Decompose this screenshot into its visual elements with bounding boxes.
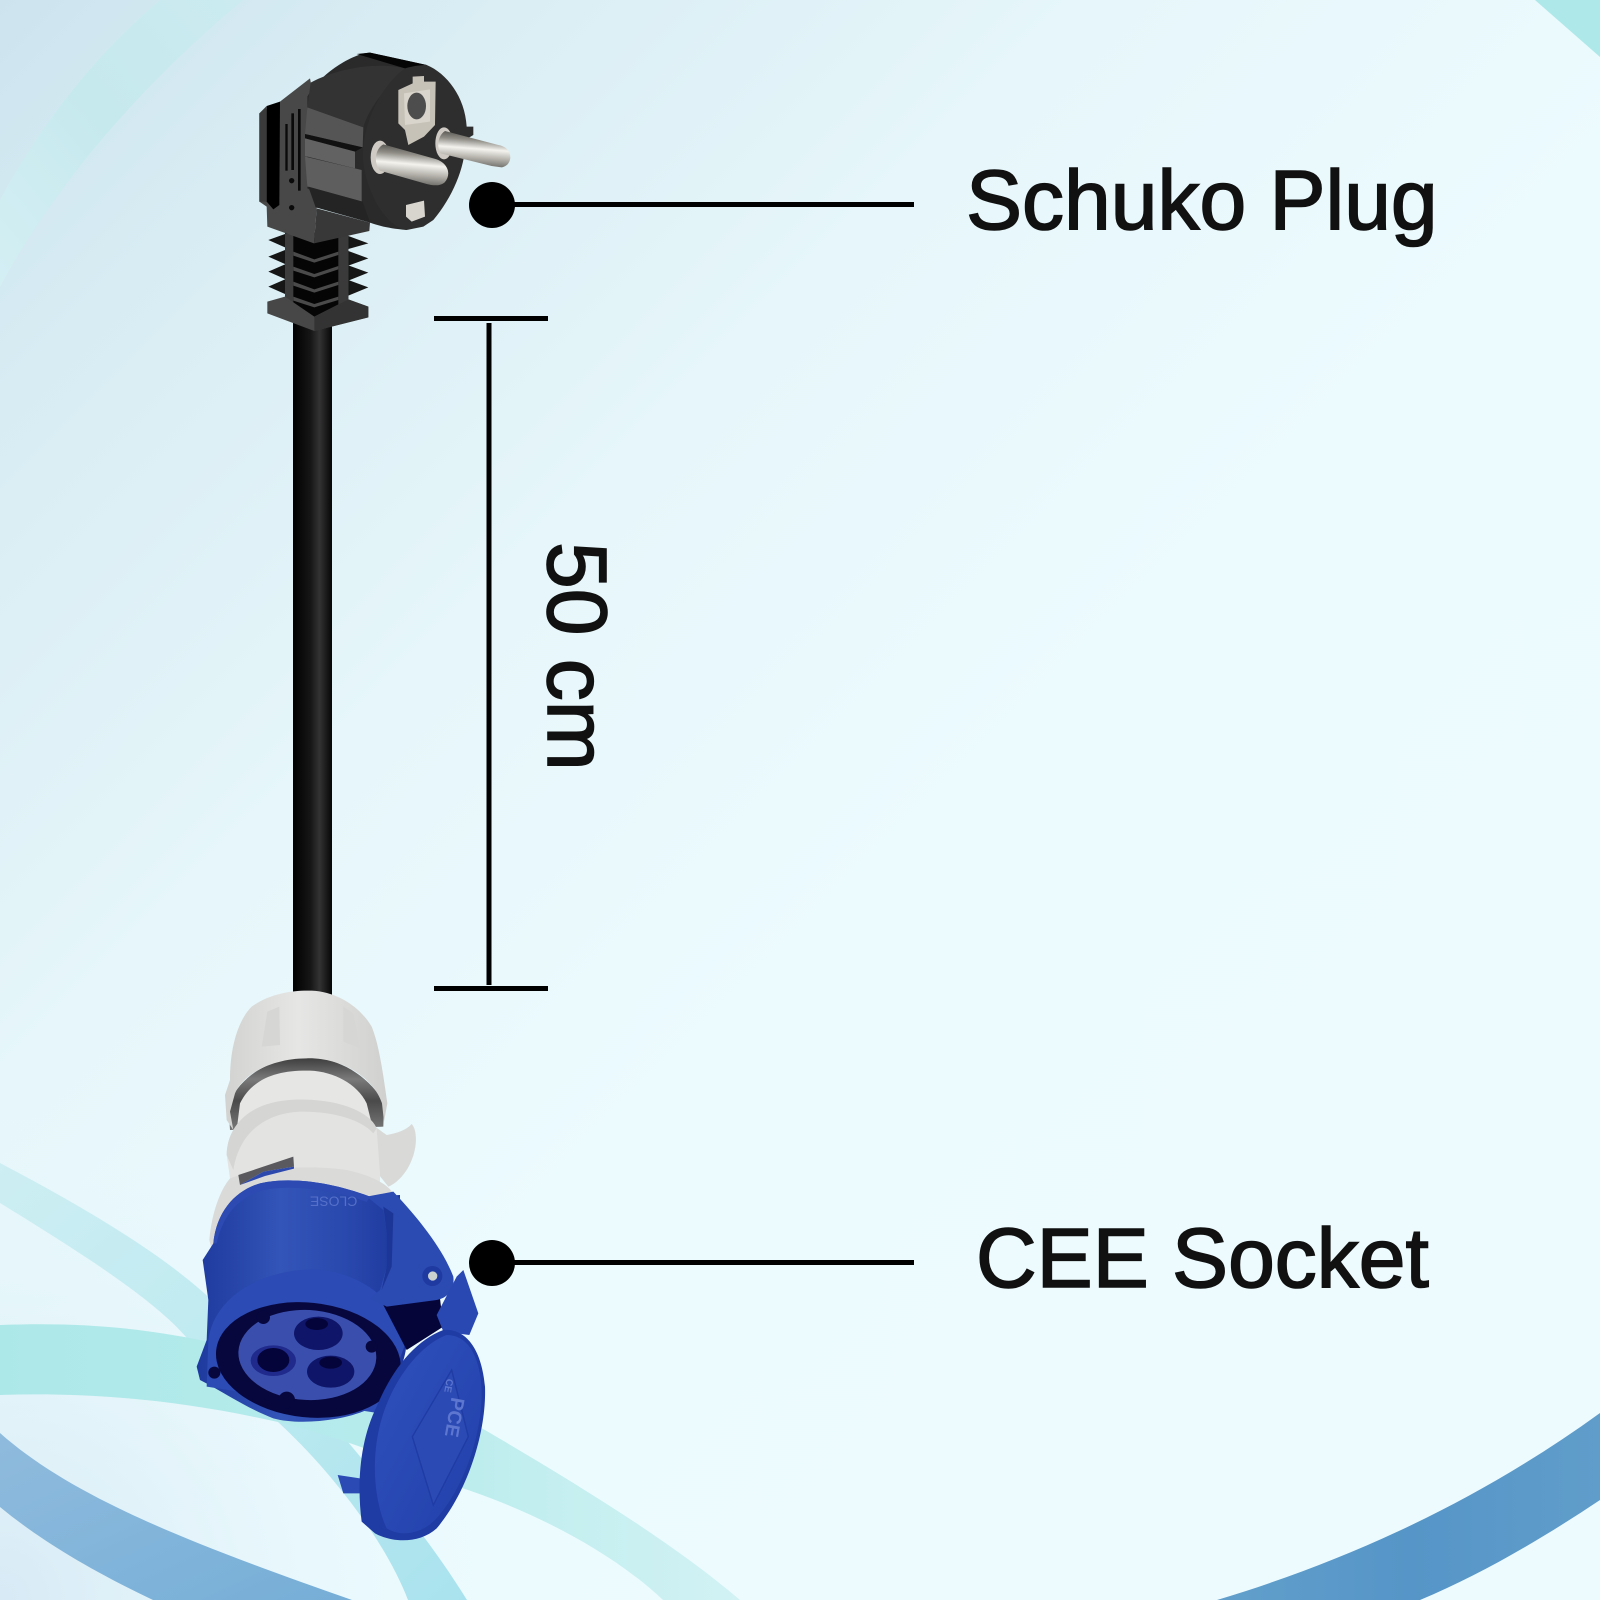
socket top rim [213,1180,370,1243]
plate notches [257,1311,378,1408]
contact holes [251,1317,354,1388]
dimension bracket: 50 cm [434,316,548,991]
lid: PCE [440,1396,467,1439]
plug rear housing [259,78,370,243]
collar upper band [227,1100,377,1170]
lid [338,1270,485,1540]
plug grip with fins [267,232,368,331]
gap under hinge [383,1298,443,1350]
ground contact [406,201,425,222]
socket body [197,1180,407,1422]
earth clip [398,76,436,145]
callout: CEE Socket marker and leader line [469,1240,914,1286]
front section of body [207,1269,407,1413]
label: CEE Socket: CEE Socket [976,1211,1429,1305]
dark thread ring [228,1057,384,1130]
cable [293,320,332,995]
inner neck [237,1071,373,1130]
pin: right [435,127,510,167]
plug head side [305,53,427,230]
locking hook [375,1124,416,1187]
collar body [227,1100,380,1193]
CEE socket blue front [197,1180,485,1540]
hinge bracket [367,1192,454,1307]
lid: CE [441,1378,455,1394]
label: Schuko Plug: Schuko Plug [966,153,1438,247]
slot [238,1157,294,1185]
CLOSE marking: CLOSE [310,1194,357,1210]
callout: Schuko Plug marker and leader line [469,182,914,228]
contact plate [236,1306,379,1404]
dimension label: 50 cm [530,542,624,771]
opening [208,1293,406,1427]
cable nut [225,991,387,1130]
lower grey ring [209,1167,393,1257]
Schuko plug illustration [259,53,510,331]
CEE socket grey rear section [209,991,416,1257]
pin: left [371,141,448,185]
plug face [363,65,473,230]
